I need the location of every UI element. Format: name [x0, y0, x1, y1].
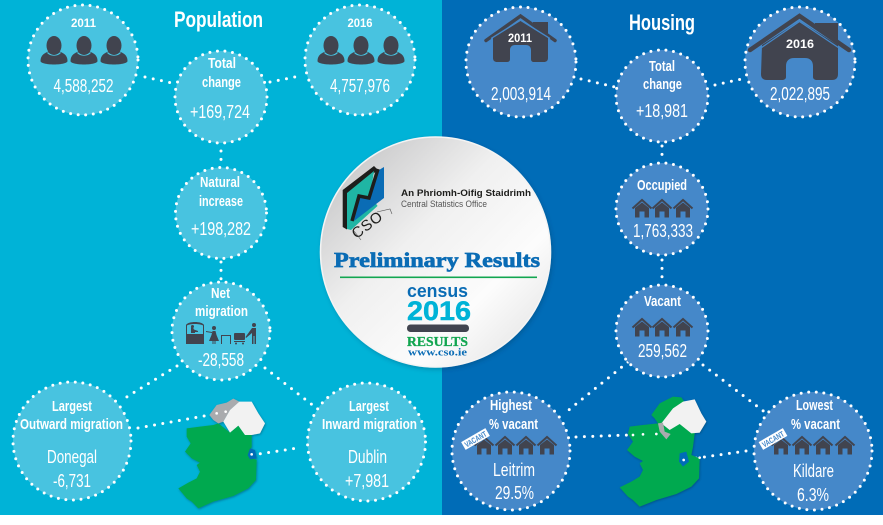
circle: housing 2016 [745, 7, 855, 117]
icon: house 2011: 2011 [508, 31, 532, 45]
circle: natural increase [176, 168, 266, 258]
circle: population 2016 [305, 5, 415, 115]
icon: house 2016: 2016 [786, 37, 814, 51]
map: Ireland, Donegal and Dublin highlighted [178, 399, 265, 508]
circle: largest inward migration: Inward migration [322, 416, 417, 433]
circle: lowest % vacant: 6.3% [797, 485, 829, 505]
circle: net migration [172, 282, 270, 380]
logo: census 2016 results: www.cso.ie [408, 348, 468, 358]
logo: CSO emblem [343, 166, 392, 242]
circle: housing 2016: 2,022,895 [770, 84, 830, 104]
circle: lowest % vacant: % vacant [791, 416, 840, 433]
background: housing side [442, 0, 883, 515]
circle: population total change: change [202, 74, 241, 91]
logo: census 2016 results [407, 281, 471, 358]
circle: occupied: 1,763,333 [633, 221, 693, 241]
circle: lowest % vacant [754, 392, 872, 510]
circle: housing 2011 [466, 7, 576, 117]
circle: largest outward migration: Donegal [47, 447, 97, 467]
background: population side [0, 0, 442, 515]
circle: population 2011: 2011 [71, 16, 96, 30]
circle: largest inward migration: Largest [349, 398, 389, 415]
circle: net migration: -28,558 [198, 350, 244, 370]
circle: largest outward migration: Outward migration [20, 416, 123, 433]
map: Ireland, Leitrim and Kildare highlighted [620, 397, 706, 507]
circle: population 2016: 4,757,976 [330, 76, 390, 96]
stamp: vacant: VACANT [463, 429, 488, 449]
heading: Preliminary Results: Preliminary Results [334, 248, 540, 272]
circle: largest outward migration [13, 382, 131, 500]
circle: lowest % vacant: Lowest [796, 397, 833, 414]
circle: largest outward migration: -6,731 [53, 471, 91, 491]
connectors: population [125, 76, 315, 455]
panel: central badge [320, 137, 550, 367]
panel: housing [452, 7, 872, 510]
circle: housing total change [616, 50, 708, 142]
circle: highest % vacant: 29.5% [495, 483, 534, 503]
circle: highest % vacant: % vacant [489, 416, 538, 433]
text: organisation name: An Phriomh-Oifig Staidrimh [401, 188, 531, 199]
circle: housing total change: change [643, 76, 682, 93]
circle: occupied [616, 163, 708, 255]
circle: highest % vacant: Leitrim [493, 460, 535, 480]
circle: housing 2011: 2,003,914 [491, 84, 551, 104]
circle: housing total change: +18,981 [636, 101, 688, 121]
icon: airport migration scene [186, 322, 256, 344]
circle: largest inward migration [308, 383, 426, 501]
circle: vacant: Vacant [644, 293, 681, 310]
heading: Population: Population [174, 7, 263, 32]
logo: census 2016 results: 2016 [407, 296, 471, 326]
panel: population [13, 5, 426, 508]
circle: natural increase: Natural [200, 174, 240, 191]
circle: natural increase: +198,282 [191, 219, 251, 239]
circle: largest inward migration: Dublin [348, 447, 387, 467]
circle: net migration: migration [195, 303, 248, 320]
disc [320, 137, 550, 367]
circle: population total change: +169,724 [190, 102, 250, 122]
circle: vacant [616, 285, 708, 377]
divider [340, 276, 537, 278]
text: organisation name in English: Central Statistics Office [401, 199, 487, 210]
circle: highest % vacant [452, 392, 570, 510]
circle: population 2011: 4,588,252 [54, 76, 114, 96]
connectors: housing [565, 78, 766, 460]
circle: lowest % vacant: Kildare [793, 461, 834, 481]
logo: census 2016 results: RESULTS [407, 335, 468, 350]
circle: population 2016: 2016 [348, 16, 373, 30]
circle: housing total change: Total [649, 58, 675, 75]
circle: net migration: Net [211, 285, 230, 302]
circle: largest inward migration: +7,981 [345, 471, 389, 491]
circle: vacant: 259,562 [638, 341, 687, 361]
circle: largest outward migration: Largest [52, 398, 92, 415]
stamp: vacant: VACANT [761, 429, 786, 449]
circle: highest % vacant: Highest [490, 397, 532, 414]
circle: occupied: Occupied [637, 177, 687, 194]
logo: CSO emblem: CSO [349, 208, 386, 242]
circle: population 2011 [28, 5, 138, 115]
heading: Housing: Housing [629, 10, 695, 35]
circle: population total change [175, 51, 267, 143]
circle: population total change: Total [208, 55, 236, 72]
circle: natural increase: increase [199, 193, 243, 210]
logo: census 2016 results: census [407, 281, 468, 301]
